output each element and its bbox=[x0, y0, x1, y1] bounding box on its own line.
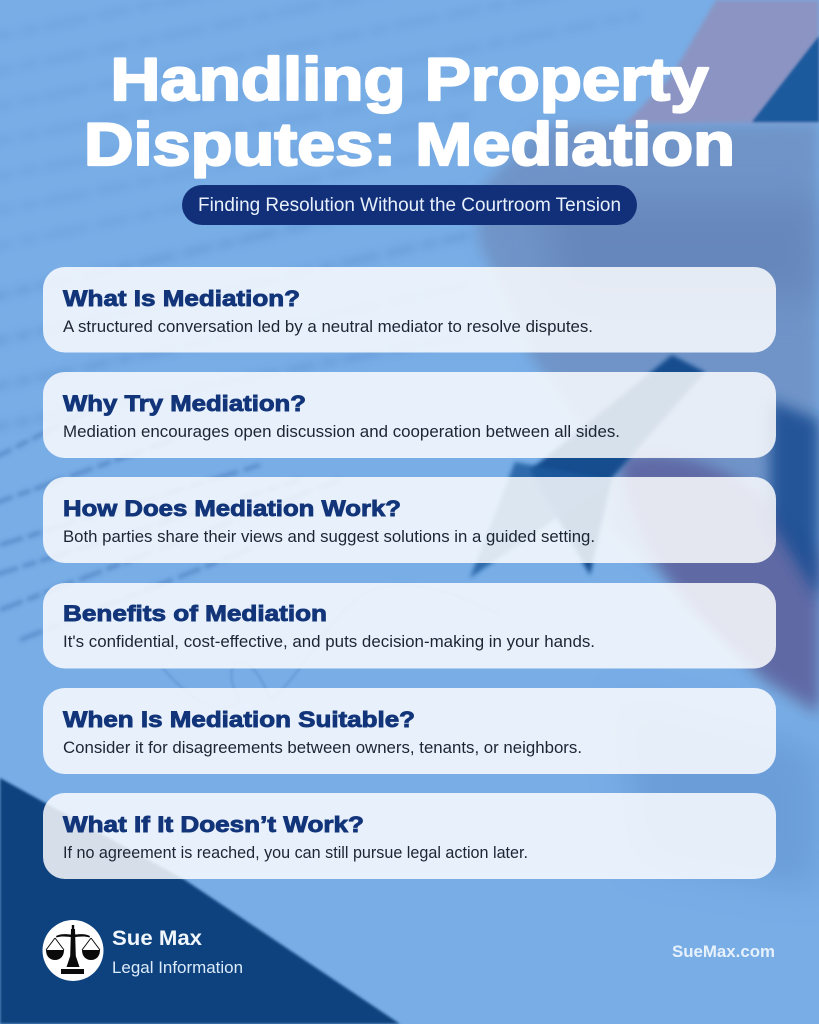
panel: When Is Mediation Suitable?: When Is Mediation Suitable? bbox=[63, 707, 415, 732]
panel: When Is Mediation Suitable?: Consider it for disagreements between owners, tenants, or neighbors. bbox=[63, 739, 582, 757]
subtitle pill bbox=[182, 185, 637, 225]
panel: What If It Doesn't Work?: What If It Doesn’t Work? bbox=[63, 812, 364, 837]
dark lower-left triangle bbox=[0, 778, 400, 1024]
panel: What If It Doesn't Work? bbox=[43, 793, 776, 879]
title bbox=[84, 46, 735, 178]
panel: Benefits of Mediation: Benefits of Mediation bbox=[63, 601, 327, 626]
icon: scales of justice logo bbox=[42, 920, 104, 981]
brand name bbox=[112, 927, 243, 977]
panel: What Is Mediation? bbox=[43, 267, 776, 352]
panel: When Is Mediation Suitable? bbox=[43, 688, 776, 774]
panel: Why Try Mediation?: Why Try Mediation? bbox=[63, 391, 306, 416]
title: Disputes: Mediation bbox=[84, 111, 735, 178]
panel: What Is Mediation?: A structured conversation led by a neutral mediator to resolve disputes. bbox=[63, 318, 593, 336]
subtitle pill: Finding Resolution Without the Courtroom Tension bbox=[198, 195, 621, 216]
panel: Benefits of Mediation: It's confidential, cost-effective, and puts decision-making in your hands. bbox=[63, 633, 595, 651]
brand name: Legal Information bbox=[112, 959, 243, 977]
panel: Why Try Mediation? bbox=[43, 372, 776, 458]
panel: What Is Mediation?: What Is Mediation? bbox=[63, 286, 300, 311]
website: SueMax.com bbox=[672, 942, 775, 961]
hand sleeve top right bbox=[625, 0, 819, 124]
panel: How Does Mediation Work?: How Does Mediation Work? bbox=[63, 496, 401, 521]
blurred document lines bbox=[0, 0, 640, 250]
title: Handling Property bbox=[110, 46, 709, 113]
panel: How Does Mediation Work? bbox=[43, 477, 776, 563]
panel: Benefits of Mediation bbox=[43, 583, 776, 668]
soft shade lower right bbox=[620, 700, 819, 890]
pen bbox=[530, 355, 705, 575]
hand body bbox=[478, 122, 819, 720]
panel: Why Try Mediation?: Mediation encourages open discussion and cooperation between all sides. bbox=[63, 423, 620, 441]
panel: How Does Mediation Work?: Both parties share their views and suggest solutions in a guided setting. bbox=[63, 528, 595, 546]
signature bbox=[160, 585, 500, 708]
finger shadows bbox=[620, 455, 819, 710]
panel: What If It Doesn't Work?: If no agreement is reached, you can still pursue legal action later. bbox=[63, 844, 528, 862]
brand name: Sue Max bbox=[112, 927, 202, 950]
